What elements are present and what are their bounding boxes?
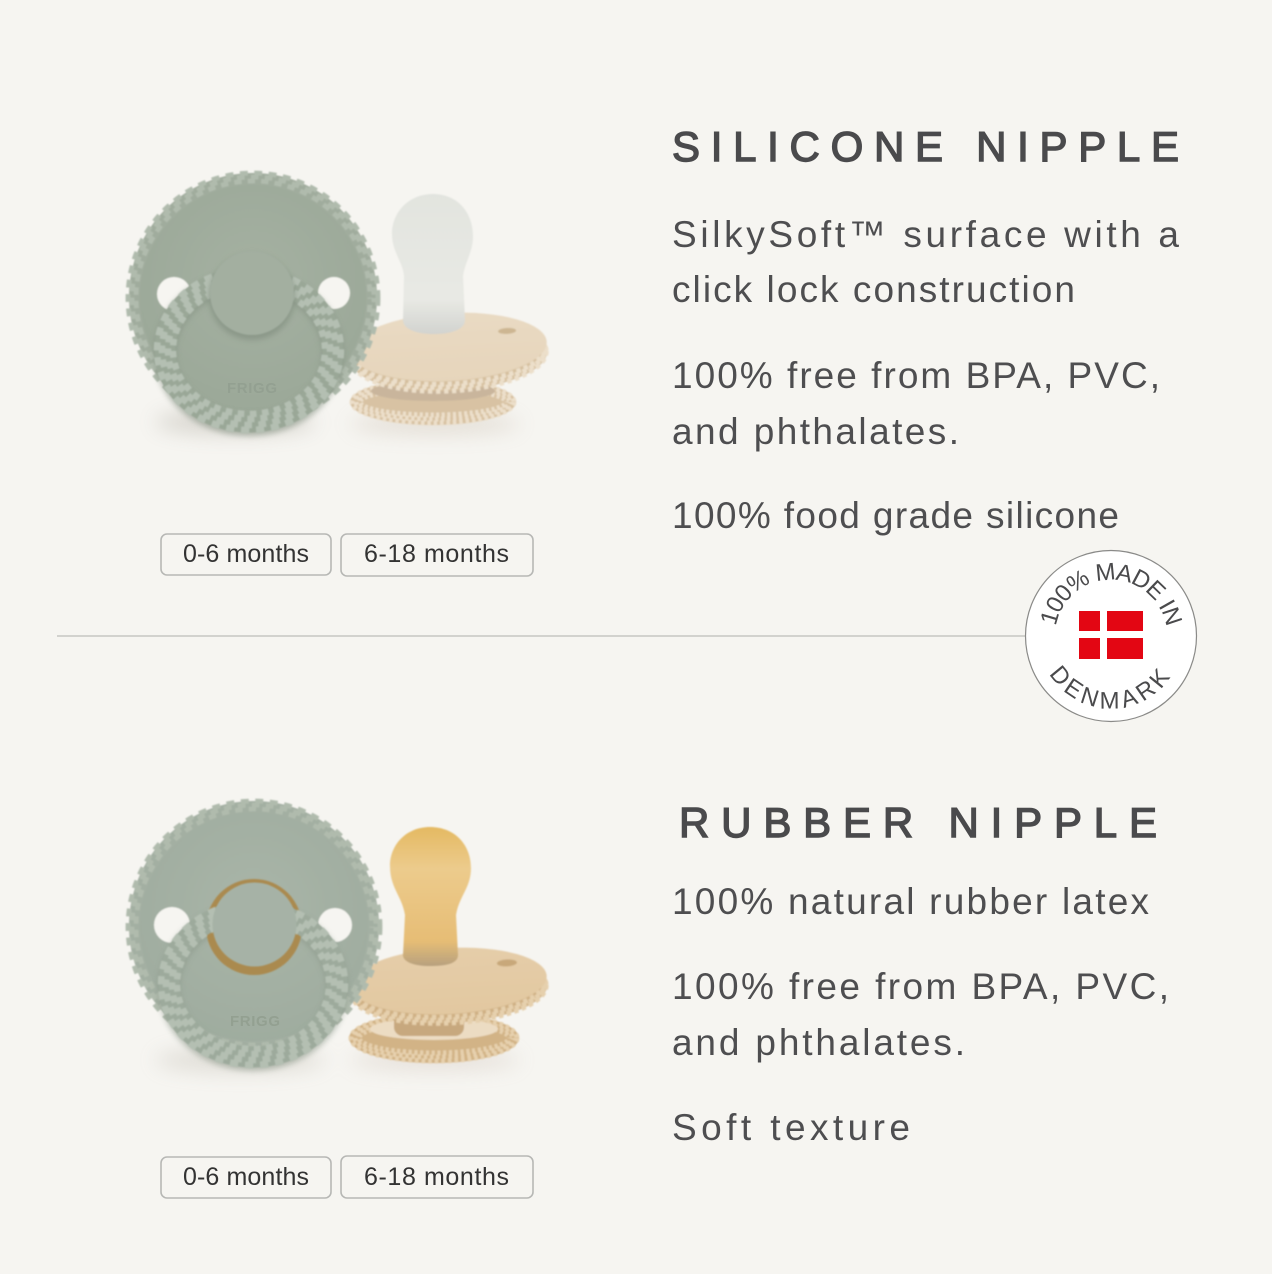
text block: silicone features: 100% food grade silicone <box>672 495 1119 536</box>
size label: 6-18 months: 6-18 months <box>364 1163 509 1191</box>
brand mark: FRIGG <box>227 380 277 397</box>
pacifier side view: cream shield <box>349 943 549 1028</box>
text block: silicone features: and phthalates. <box>672 411 959 452</box>
heading: silicone nipple: SILICONE NIPPLE <box>672 123 1179 170</box>
text block: silicone features: click lock construction <box>672 269 1075 310</box>
heading: rubber nipple: RUBBER NIPPLE <box>679 799 1157 846</box>
badge text <box>1041 562 1182 709</box>
badge text: DENMARK <box>1050 665 1170 709</box>
size label: 0-6 months: 0-6 months <box>183 1163 309 1191</box>
badge text: 100% MADE IN <box>1041 562 1182 626</box>
size label: 6-18 months: 6-18 months <box>364 540 509 568</box>
text block: rubber features: and phthalates. <box>672 1022 965 1063</box>
rubber collar <box>206 879 302 975</box>
product shadow <box>155 1048 520 1072</box>
pacifier front view: green shield <box>128 801 380 1053</box>
rope handle <box>157 270 341 430</box>
centre button <box>210 251 294 335</box>
rubber nipple <box>390 827 471 966</box>
pacifier front view: green shield <box>128 173 378 423</box>
brand mark: FRIGG <box>230 1013 280 1030</box>
panel: silicone nipple product <box>128 173 549 434</box>
badge: 100% made in Denmark <box>1024 550 1198 722</box>
rope handle shadow <box>165 281 333 425</box>
icon: Danish flag <box>1079 611 1143 659</box>
text block: silicone features: SilkySoft™ surface with a <box>672 214 1179 255</box>
pacifier side view: cream ring <box>349 1012 519 1063</box>
text block: rubber features: Soft texture <box>672 1107 910 1148</box>
panel: rubber nipple product <box>128 801 549 1072</box>
product shadow <box>155 410 520 434</box>
text block: rubber features: 100% free from BPA, PVC, <box>672 966 1169 1007</box>
text block: rubber features: 100% natural rubber latex <box>672 881 1150 922</box>
rope handle <box>161 903 345 1065</box>
button shadow <box>209 254 295 340</box>
size label: 6-18 months <box>341 534 533 576</box>
rope handle shadow <box>169 914 337 1060</box>
pacifier side view: cream shield <box>349 308 549 396</box>
text block: silicone features <box>672 214 1179 536</box>
text block: rubber features <box>672 881 1169 1148</box>
divider <box>57 635 1030 637</box>
pacifier side view: cream ring <box>350 379 516 425</box>
size label: 0-6 months <box>161 534 331 575</box>
silicone nipple <box>392 194 473 334</box>
text block: silicone features: 100% free from BPA, PVC, <box>672 355 1160 396</box>
size label: 0-6 months: 0-6 months <box>183 540 309 568</box>
size label: 6-18 months <box>341 1156 533 1198</box>
size label: 0-6 months <box>161 1157 331 1198</box>
centre button <box>212 882 296 966</box>
